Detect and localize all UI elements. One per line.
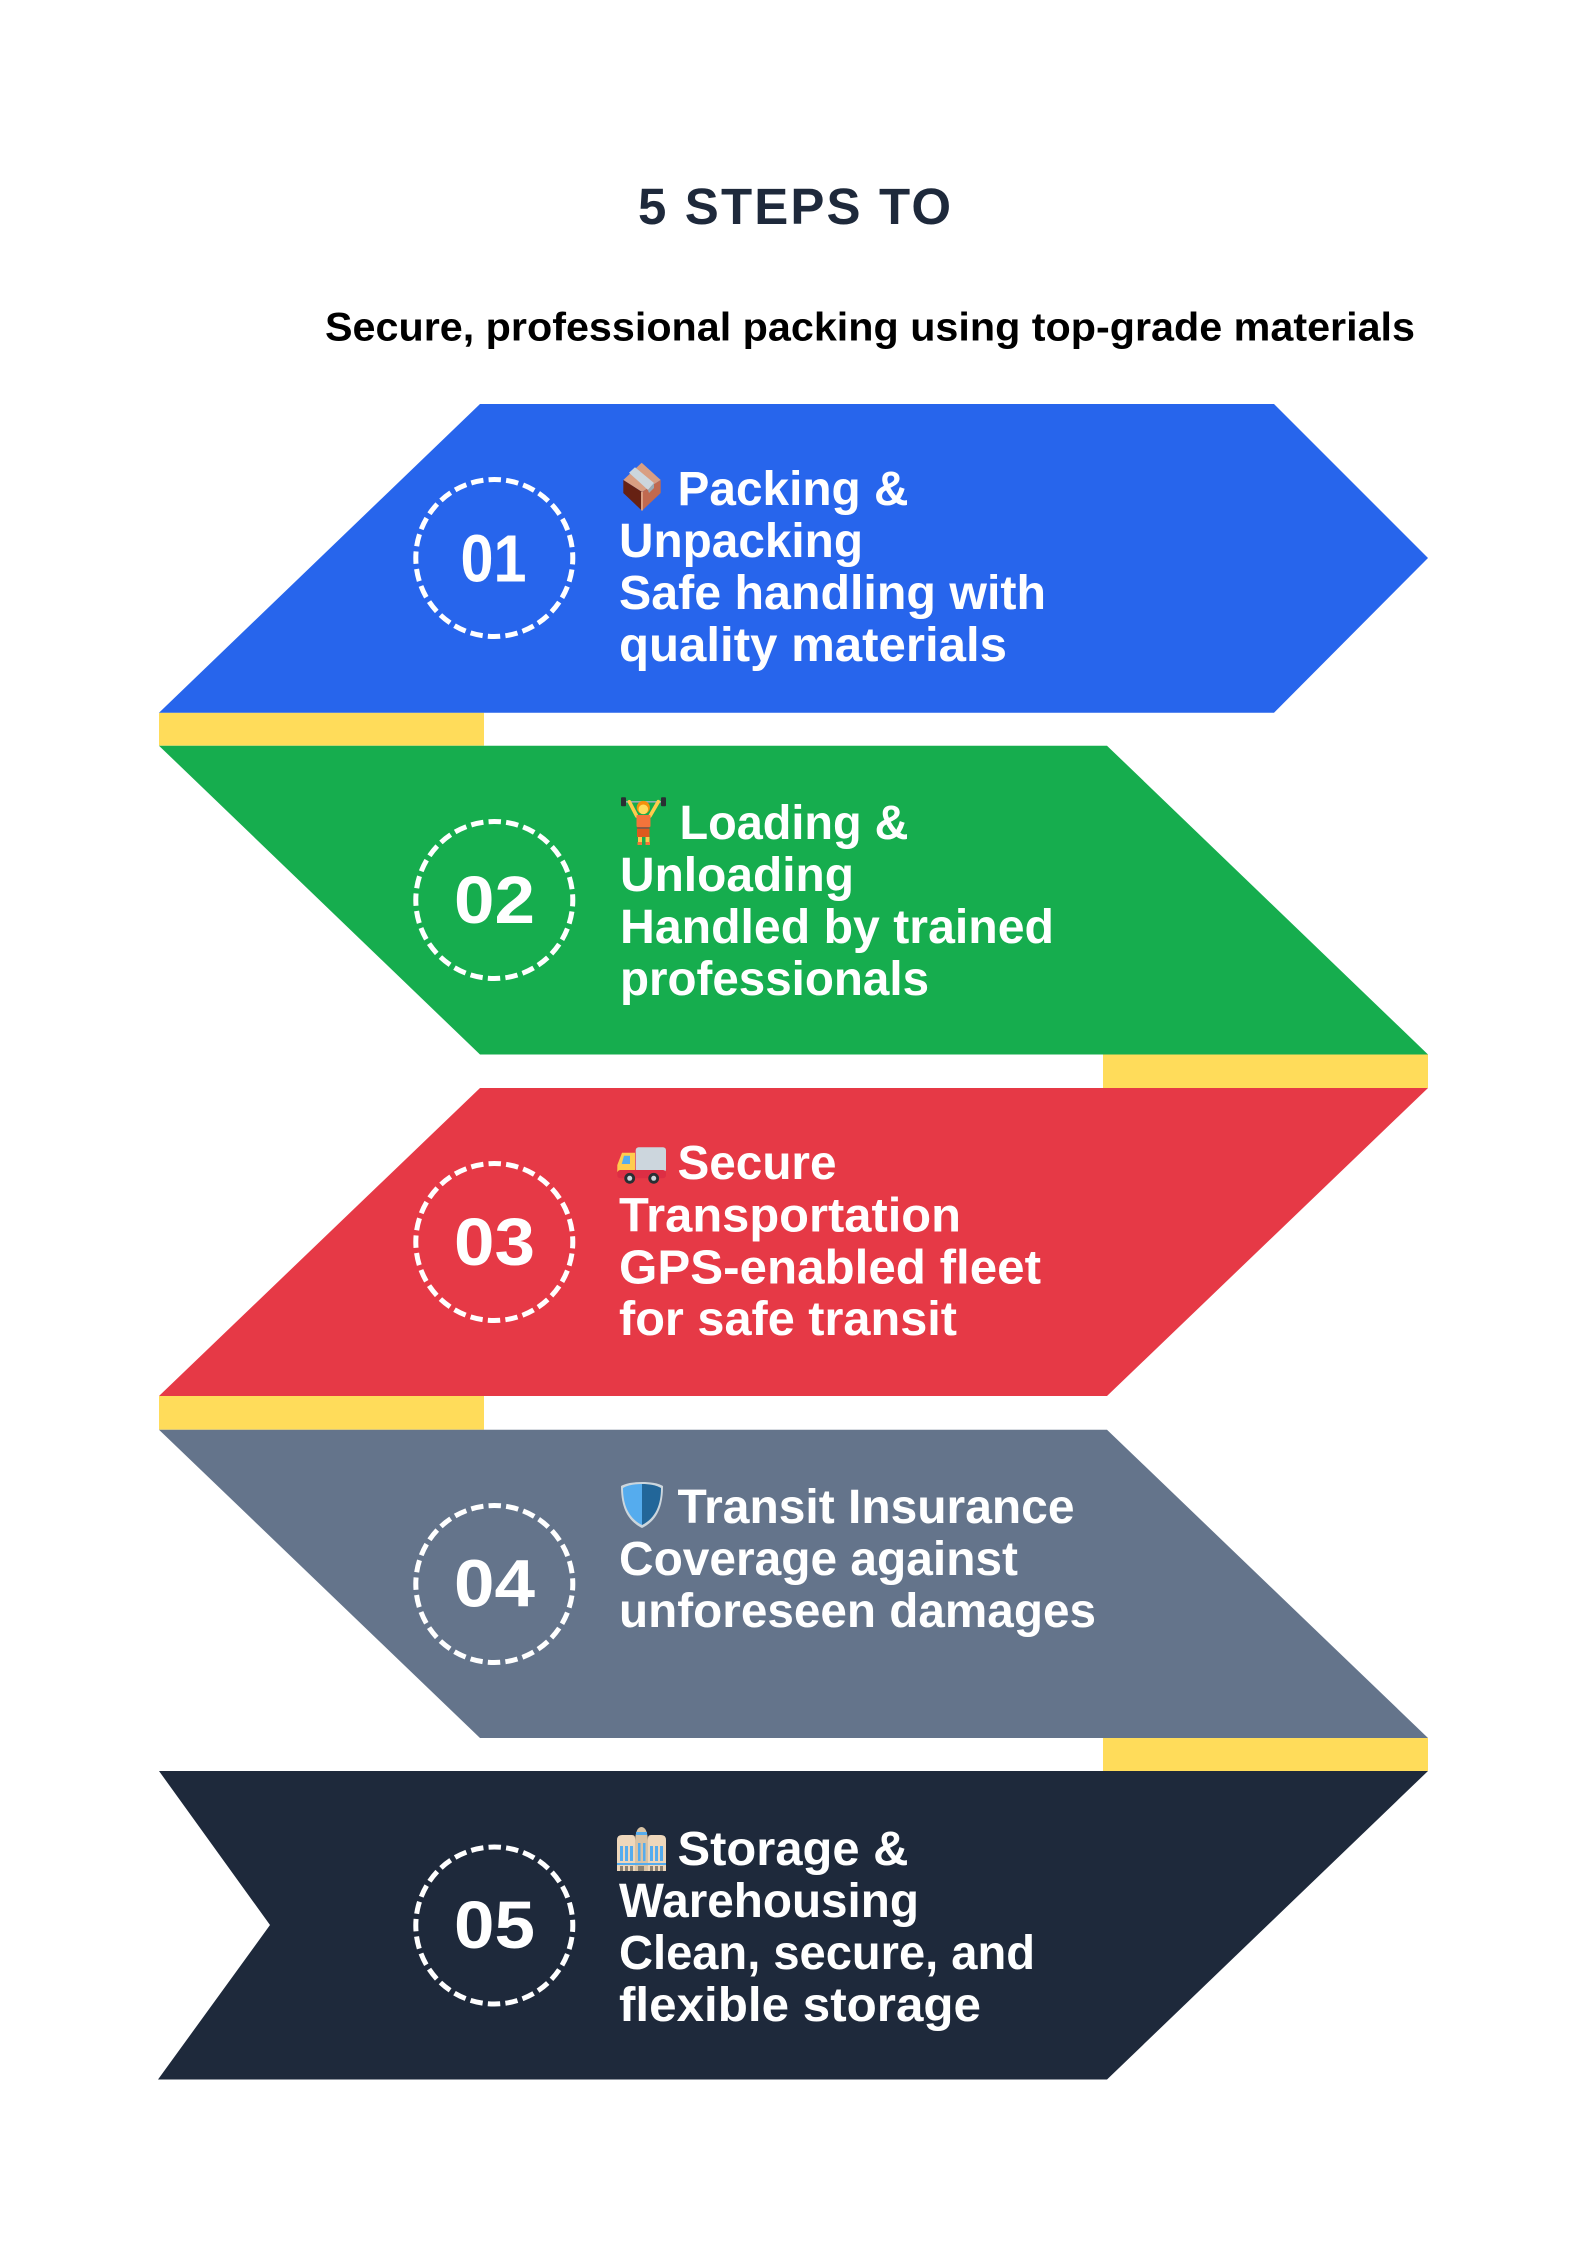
step text 04: Coverage against bbox=[619, 1533, 1018, 1586]
title: 5 STEPS TO bbox=[638, 178, 951, 235]
step text 03: for safe transit bbox=[619, 1293, 957, 1346]
panel: step 02 loading bbox=[159, 746, 1428, 1054]
panel: step 01 packing bbox=[159, 404, 1428, 713]
step text 02: Handled by trained bbox=[620, 901, 1054, 954]
step text 01: quality materials bbox=[619, 619, 1007, 672]
step text 01: Packing & bbox=[678, 463, 908, 516]
step text 05: Warehousing bbox=[619, 1875, 919, 1928]
step text 05: Storage & bbox=[678, 1823, 908, 1876]
icon: weightlifter bbox=[621, 797, 666, 845]
step text 05: flexible storage bbox=[619, 1979, 981, 2032]
step text 02: Unloading bbox=[620, 849, 854, 902]
yellow connector 4 bbox=[1103, 1738, 1428, 1771]
panel: step 05 storage bbox=[158, 1771, 1428, 2080]
step text 01: Unpacking bbox=[619, 515, 863, 568]
step text 04 bbox=[619, 1481, 1096, 1638]
step text 01: Safe handling with bbox=[619, 567, 1046, 620]
step text 03: Secure bbox=[678, 1137, 836, 1190]
yellow connector 2 bbox=[1103, 1054, 1428, 1088]
step text 05 bbox=[619, 1823, 1035, 2032]
panel: step 03 transportation bbox=[159, 1088, 1428, 1396]
icon: truck bbox=[617, 1147, 666, 1184]
step number 04: 04 bbox=[454, 1546, 535, 1622]
yellow connector 3 bbox=[159, 1396, 484, 1430]
step text 03: GPS-enabled fleet bbox=[619, 1241, 1041, 1294]
step number 03: 03 bbox=[454, 1205, 535, 1280]
step number 01: 01 bbox=[460, 522, 526, 596]
step text 03 bbox=[619, 1137, 1041, 1346]
step text 02: professionals bbox=[620, 953, 929, 1006]
yellow connector 1 bbox=[159, 713, 484, 746]
step text 02 bbox=[620, 797, 1054, 1006]
icon: package bbox=[623, 463, 661, 511]
step text 04: unforeseen damages bbox=[619, 1585, 1096, 1638]
panel: step 04 insurance bbox=[159, 1430, 1428, 1738]
step text 01 bbox=[619, 463, 1046, 672]
step number 05: 05 bbox=[454, 1888, 535, 1963]
step text 03: Transportation bbox=[619, 1189, 961, 1242]
icon: shield bbox=[621, 1482, 663, 1528]
step text 02: Loading & bbox=[680, 797, 908, 850]
step text 05: Clean, secure, and bbox=[619, 1927, 1035, 1980]
icon: department building bbox=[617, 1827, 666, 1871]
step number 02: 02 bbox=[454, 863, 535, 938]
subtitle: Secure, professional packing using top-grade materials bbox=[325, 306, 1415, 350]
step text 04: Transit Insurance bbox=[678, 1481, 1074, 1534]
